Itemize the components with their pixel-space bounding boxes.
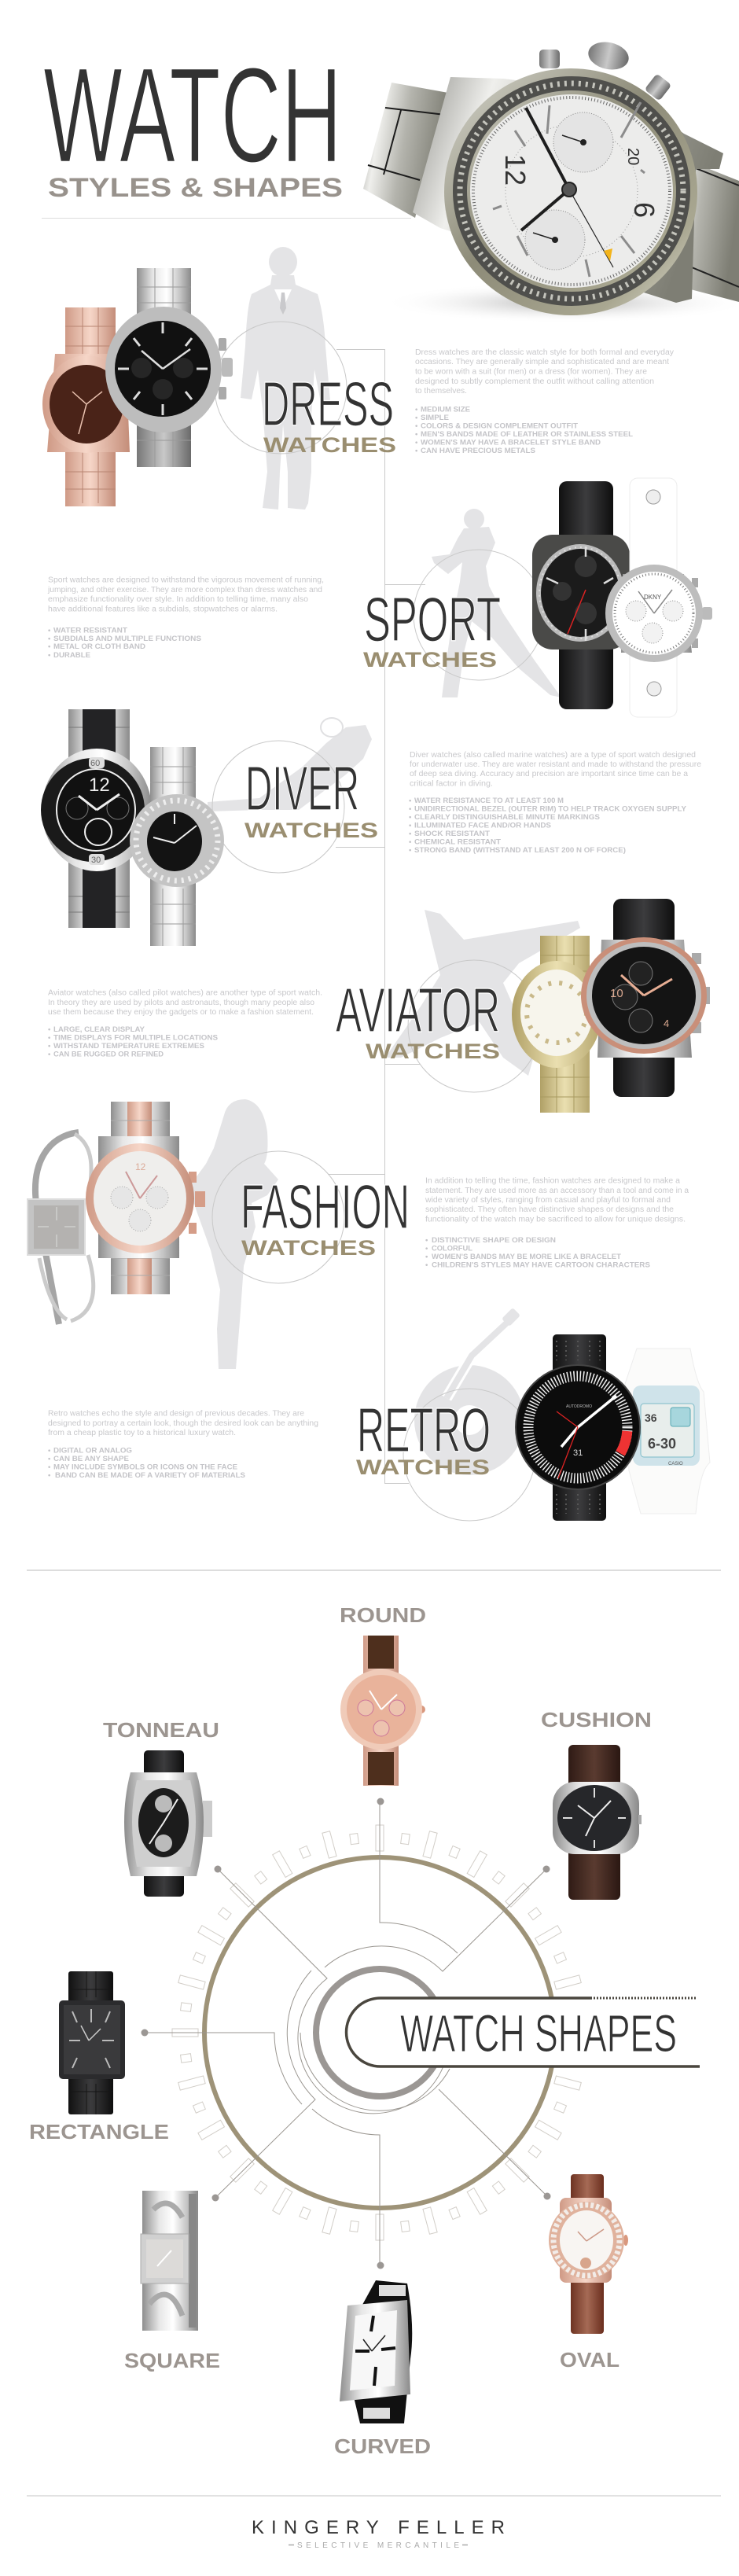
- section: sport watches: [47, 478, 712, 717]
- text: dress description: occasions. They are generally simple and sophisticated and are meant: [415, 358, 669, 366]
- list: diver traits: [409, 797, 687, 855]
- list: sport traits: METAL OR CLOTH BAND: [53, 642, 145, 651]
- text: diver description: Diver watches (also called marine watches) are a type of sport watch designed: [410, 751, 696, 760]
- text: retro description: [48, 1409, 318, 1437]
- list: aviator traits: •: [48, 1025, 51, 1034]
- list: fashion traits: CHILDREN'S STYLES MAY HAVE CARTOON CHARACTERS: [432, 1261, 650, 1269]
- list: aviator traits: •: [48, 1033, 51, 1043]
- list: aviator traits: TIME DISPLAYS FOR MULTIPLE LOCATIONS: [53, 1033, 218, 1043]
- subheading: WATCHES: WATCHES: [366, 1040, 500, 1063]
- watch: black and rose chronograph: [581, 899, 710, 1097]
- text: dress description: to be worn with a suit (for men) or a dress (for women). They are: [415, 368, 647, 376]
- watch: steel diver: [130, 747, 224, 946]
- list: sport traits: WATER RESISTANT: [53, 626, 127, 635]
- list: aviator traits: [48, 1025, 218, 1058]
- text: dress description: [415, 348, 674, 396]
- text: fashion description: In addition to telling the time, fashion watches are designed to make a: [425, 1176, 680, 1186]
- heading: AVIATOR: AVIATOR: [336, 975, 500, 1045]
- list: fashion traits: •: [425, 1236, 428, 1245]
- list: dress traits: •: [415, 439, 418, 447]
- text: fashion description: [425, 1176, 689, 1224]
- shape: square: [124, 2191, 220, 2372]
- list: fashion traits: •: [425, 1261, 428, 1269]
- list: dress traits: •: [415, 430, 418, 439]
- list: diver traits: •: [409, 838, 412, 846]
- shape: round: [340, 1603, 426, 1786]
- list: aviator traits: •: [48, 1051, 51, 1058]
- list: diver traits: UNIDIRECTIONAL BEZEL (OUTER RIM) TO HELP TRACK OXYGEN SUPPLY: [414, 805, 687, 813]
- watch: black and steel diver: 12: [89, 775, 110, 796]
- list: fashion traits: WOMEN'S BANDS MAY BE MORE LIKE A BRACELET: [432, 1253, 621, 1261]
- list: dress traits: CAN HAVE PRECIOUS METALS: [421, 447, 535, 455]
- watch: black and rose chronograph: 4: [664, 1018, 669, 1029]
- list: dress traits: COLORS & DESIGN COMPLEMENT OUTFIT: [421, 421, 578, 431]
- shape: oval: [549, 2174, 628, 2372]
- list: sport traits: •: [48, 651, 51, 660]
- list: retro traits: •: [48, 1463, 51, 1472]
- list: sport traits: •: [48, 642, 51, 651]
- list: fashion traits: [425, 1236, 650, 1269]
- watch: black sport: [532, 481, 630, 709]
- list: diver traits: •: [409, 813, 412, 822]
- shape: cushion: [541, 1708, 652, 1900]
- list: dress traits: [415, 406, 633, 455]
- list: retro traits: [48, 1447, 245, 1480]
- section: retro watches: [48, 1308, 710, 1521]
- list: diver traits: WATER RESISTANCE TO AT LEAST 100 M: [414, 797, 564, 805]
- heading: RETRO: RETRO: [357, 1395, 491, 1465]
- text: diver description: of deep sea diving. Accuracy and precision are important since time can be a: [410, 770, 688, 778]
- shape: square: SQUARE: [124, 2349, 220, 2372]
- text: fashion description: sophisticated. They often have distinctive shapes or designs and the: [425, 1205, 674, 1214]
- list: fashion traits: •: [425, 1244, 428, 1253]
- list: diver traits: SHOCK RESISTANT: [414, 830, 490, 838]
- list: dress traits: •: [415, 414, 418, 422]
- heading: DIVER: DIVER: [245, 753, 359, 823]
- text: retro description: Retro watches echo the style and design of previous decades. They are: [48, 1409, 304, 1419]
- list: dress traits: WOMEN'S MAY HAVE A BRACELET STYLE BAND: [421, 439, 601, 447]
- watch: silver chronograph: [105, 268, 233, 467]
- section: diver watches: [41, 709, 701, 946]
- list: diver traits: •: [409, 797, 412, 805]
- text: sport description: jumping, and other exercise. They are more complex than dress watches and: [47, 586, 322, 594]
- ticks ring: [172, 1825, 581, 2240]
- list: sport traits: DURABLE: [53, 651, 90, 660]
- shape: tonneau: [103, 1718, 219, 1897]
- list: diver traits: ILLUMINATED FACE AND/OR HANDS: [414, 821, 551, 830]
- watch: digital white: CASIO: [668, 1462, 683, 1466]
- text: fashion description: wide variety of styles, ranging from casual and playful to formal and: [425, 1196, 671, 1205]
- text: diver description: critical factor in diving.: [410, 780, 493, 788]
- list: diver traits: STRONG BAND (WITHSTAND AT LEAST 200 N OF FORCE): [414, 846, 626, 855]
- text: diver description: for underwater use. They are water resistant and made to withstand the pressure: [410, 760, 701, 769]
- section: dress watches: [42, 247, 674, 510]
- list: dress traits: MEDIUM SIZE: [421, 406, 470, 414]
- text: fashion description: functionality of the watch may be sacrificed to allow for unique designs.: [425, 1216, 686, 1224]
- text: fashion description: statement. They are used more as an accessory than a tool and come in a: [425, 1187, 689, 1195]
- hero watch: 20: [624, 148, 642, 165]
- list: sport traits: •: [48, 635, 51, 643]
- watch: black and steel diver: [41, 709, 152, 928]
- silhouette: woman: [189, 1099, 278, 1369]
- list: fashion traits: COLORFUL: [432, 1244, 472, 1253]
- list: retro traits: •: [48, 1447, 51, 1455]
- subheading: WATCHES: WATCHES: [363, 648, 497, 672]
- footer: brand: KINGERY FELLER: [252, 2517, 505, 2538]
- text: sport description: emphasize functionality over style. In addition to telling time, many also: [48, 595, 308, 604]
- list: aviator traits: LARGE, CLEAR DISPLAY: [53, 1025, 145, 1034]
- hero watch: 6: [628, 202, 660, 218]
- text: aviator description: use them because they enjoy the gadgets or to make a fashion statement.: [48, 1008, 314, 1017]
- list: diver traits: •: [409, 805, 412, 813]
- shape: curved: CURVED: [334, 2434, 431, 2458]
- text: retro description: from a cheap plastic toy to a historical luxury watch.: [48, 1429, 236, 1437]
- text: sport description: have additional features like a subdials, stopwatches or alarms.: [48, 605, 278, 613]
- list: diver traits: •: [409, 846, 412, 855]
- shape: rectangle: RECTANGLE: [29, 2120, 169, 2144]
- silhouette: scuba diver: [208, 718, 372, 811]
- subheading: WATCHES: WATCHES: [244, 819, 378, 842]
- watch: white chronograph: DKNY: [644, 594, 662, 601]
- list: diver traits: CLEARLY DISTINGUISHABLE MINUTE MARKINGS: [414, 813, 600, 822]
- list: retro traits: •: [48, 1471, 51, 1480]
- text: retro description: designed to portray a certain look, though the desired look can be anything: [48, 1419, 318, 1428]
- watch: white chronograph: [605, 478, 712, 717]
- watch: gold: [512, 936, 601, 1113]
- list: sport traits: SUBDIALS AND MULTIPLE FUNCTIONS: [53, 635, 201, 643]
- text: aviator description: Aviator watches (also called pilot watches) are another type of sport watch.: [48, 989, 322, 997]
- watch: black and steel diver: 30: [91, 856, 101, 865]
- list: dress traits: •: [415, 406, 418, 414]
- list: aviator traits: •: [48, 1042, 51, 1051]
- hero watch: 12: [499, 154, 531, 186]
- list: dress traits: •: [415, 421, 418, 431]
- list: retro traits: BAND CAN BE MADE OF A VARIETY OF MATERIALS: [55, 1471, 245, 1480]
- footer: brand: SELECTIVE MERCANTILE: [297, 2541, 459, 2550]
- watch: digital white: 36: [645, 1411, 657, 1424]
- watch: silver and rose chronograph: 12: [135, 1161, 146, 1172]
- shape: round: ROUND: [340, 1603, 426, 1627]
- shape: tonneau: TONNEAU: [103, 1718, 219, 1742]
- text: aviator description: [48, 989, 322, 1017]
- hero watch: [363, 39, 739, 323]
- list: retro traits: •: [48, 1455, 51, 1463]
- text: dress description: Dress watches are the classic watch style for both formal and everyday: [415, 348, 674, 357]
- list: sport traits: [48, 626, 201, 660]
- watch: black retro: [516, 1334, 640, 1521]
- watch: silver and rose chronograph: [86, 1102, 205, 1294]
- heading: FASHION: FASHION: [241, 1172, 410, 1242]
- text: sport description: [47, 576, 324, 613]
- shape: rectangle: [29, 1971, 169, 2144]
- heading: WATCH: WATCH: [43, 39, 342, 191]
- watch: digital white: 6-30: [648, 1436, 676, 1452]
- subheading: STYLES & SHAPES: [48, 173, 343, 203]
- list: sport traits: •: [48, 626, 51, 635]
- label: watch shapes: [347, 1998, 700, 2066]
- shape: cushion: CUSHION: [541, 1708, 652, 1731]
- list: dress traits: MEN'S BANDS MADE OF LEATHER OR STAINLESS STEEL: [421, 430, 633, 439]
- subheading: WATCHES: WATCHES: [356, 1455, 490, 1479]
- heading: SPORT: SPORT: [364, 584, 501, 654]
- section: aviator watches: [48, 899, 710, 1113]
- watch: black retro: 31: [573, 1448, 583, 1458]
- watch: crystal bangle: [28, 1132, 94, 1324]
- list: aviator traits: WITHSTAND TEMPERATURE EXTREMES: [53, 1042, 204, 1051]
- list: diver traits: CHEMICAL RESISTANT: [414, 838, 501, 846]
- shape: oval: OVAL: [560, 2348, 620, 2372]
- list: retro traits: CAN BE ANY SHAPE: [53, 1455, 129, 1463]
- title: [43, 39, 343, 203]
- text: dress description: to themselves.: [415, 387, 467, 396]
- subheading: WATCHES: WATCHES: [263, 433, 396, 457]
- watch: digital white: [625, 1349, 710, 1514]
- list: dress traits: •: [415, 447, 418, 455]
- heading: DRESS: DRESS: [262, 369, 394, 439]
- text: dress description: designed to subtly complement the outfit without calling attention: [415, 377, 654, 386]
- diagram: watch shapes dial: [142, 1798, 700, 2269]
- shape: curved: [334, 2280, 431, 2458]
- watch: rose gold: [42, 307, 131, 506]
- silhouette: businessman: [241, 247, 330, 510]
- watch: black retro: AUTODROMO: [566, 1404, 592, 1409]
- list: fashion traits: DISTINCTIVE SHAPE OR DESIGN: [432, 1236, 556, 1245]
- watch: black and steel diver: 60: [90, 759, 100, 768]
- footer: brand: [252, 2517, 505, 2550]
- silhouette: airplane: [385, 910, 580, 1076]
- text: aviator description: In theory they are used by pilots and astronauts, though many people also: [48, 999, 314, 1007]
- list: fashion traits: •: [425, 1253, 428, 1261]
- watch: black and rose chronograph: 10: [610, 987, 623, 1000]
- list: retro traits: MAY INCLUDE SYMBOLS OR ICONS ON THE FACE: [53, 1463, 237, 1472]
- list: dress traits: SIMPLE: [421, 414, 449, 422]
- silhouette: runner: [432, 509, 561, 697]
- text: sport description: Sport watches are designed to withstand the vigorous movement of running,: [48, 576, 324, 585]
- list: diver traits: •: [409, 821, 412, 830]
- connector lines: [142, 1798, 550, 2269]
- text: diver description: [410, 751, 701, 788]
- list: aviator traits: CAN BE RUGGED OR REFINED: [53, 1051, 164, 1058]
- list: diver traits: •: [409, 830, 412, 838]
- silhouette: record player: [414, 1308, 524, 1475]
- section: fashion watches: [28, 1099, 689, 1369]
- list: retro traits: DIGITAL OR ANALOG: [53, 1447, 132, 1455]
- subheading: WATCHES: WATCHES: [241, 1236, 376, 1260]
